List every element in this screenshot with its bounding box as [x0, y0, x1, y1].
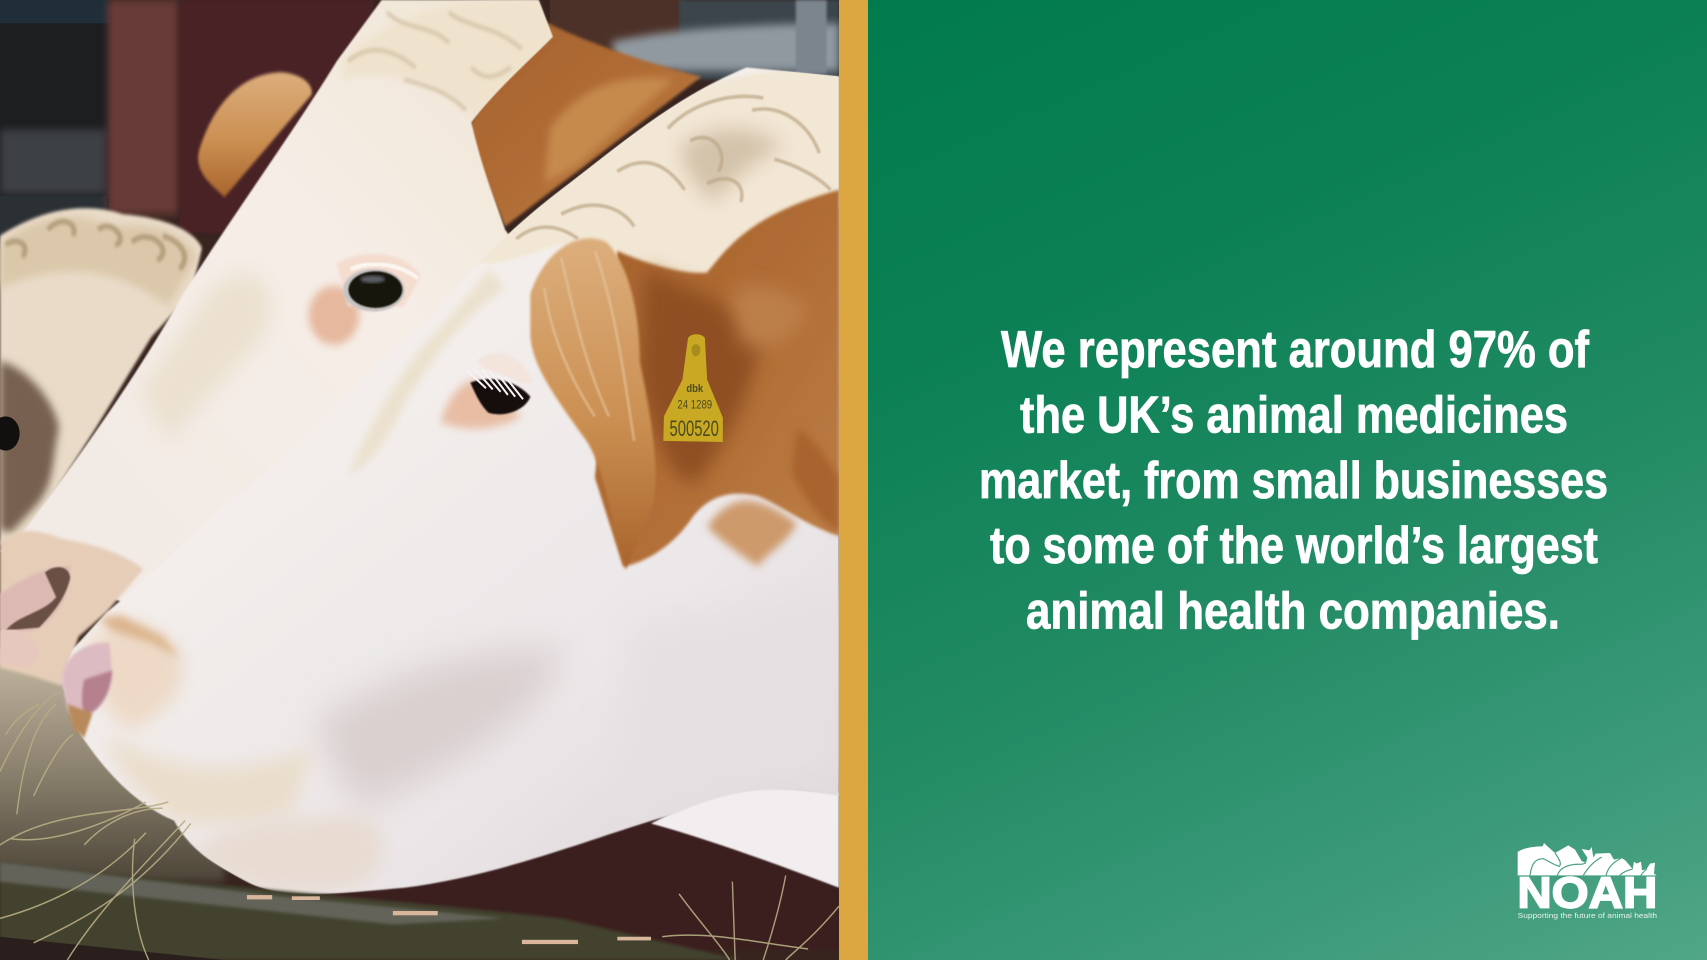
front cow head — [62, 67, 839, 894]
headline statement: the UK’s animal medicines — [1020, 386, 1568, 444]
nostril — [62, 643, 112, 719]
logo tagline: Supporting the future of animal health — [1518, 913, 1657, 920]
ear tag: 24 1289 — [677, 398, 712, 411]
second cow face — [0, 0, 561, 612]
headline statement: animal health companies. — [1026, 582, 1560, 640]
front cow neck below jaw — [651, 784, 839, 888]
headline statement — [979, 321, 1608, 640]
ear tag: dbk — [686, 382, 703, 395]
photo background: barn — [0, 0, 839, 960]
headline statement: We represent around 97% of — [1001, 321, 1590, 379]
panel: photo of cows feeding — [0, 0, 839, 960]
logo animal silhouettes — [1518, 843, 1657, 883]
panel: green gradient background — [868, 0, 1707, 960]
second cow eye — [309, 254, 421, 345]
second cow ear — [198, 72, 312, 197]
headline statement: to some of the world’s largest — [990, 517, 1598, 575]
second cow muzzle — [0, 531, 143, 686]
front cow ear — [530, 238, 656, 569]
logo wordmark: NOAH — [1517, 868, 1657, 917]
gold divider bar — [839, 0, 868, 960]
front cow face — [62, 67, 839, 894]
lip, cream — [107, 735, 314, 824]
brown patch — [595, 190, 839, 566]
second cow head — [0, 0, 702, 686]
ear tag — [663, 334, 723, 442]
forelock — [477, 71, 839, 288]
logo: NOAH — [1517, 843, 1657, 920]
ear tag: 500520 — [670, 417, 719, 441]
front cow eye — [441, 353, 533, 429]
hay — [0, 692, 839, 960]
shading on jaw — [314, 649, 561, 808]
third cow, partly hidden at left — [0, 208, 202, 545]
trough with debris — [0, 862, 741, 960]
second cow brown neck — [471, 18, 702, 227]
